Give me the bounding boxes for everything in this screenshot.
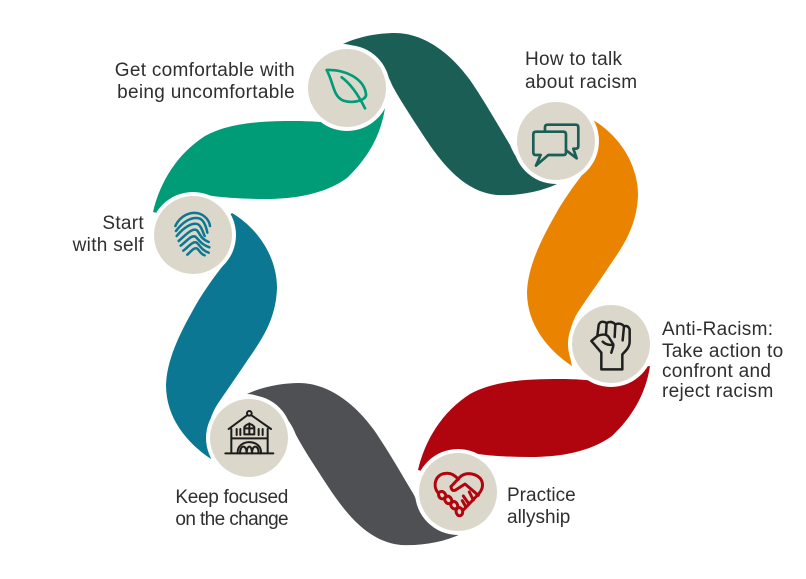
icon: fingerprint — [175, 213, 210, 255]
ribbon: teal — [166, 213, 277, 459]
ribbon: dark green — [343, 33, 557, 195]
label: practice allyship: allyship — [507, 507, 570, 528]
node: house — [206, 395, 292, 481]
node: handshake heart — [415, 449, 501, 535]
node: speech bubbles — [513, 98, 599, 184]
node: raised fist — [568, 301, 654, 387]
label: how to talk: about racism — [525, 72, 637, 93]
ribbon: charcoal — [247, 383, 461, 545]
label: anti-racism: confront and — [662, 361, 771, 382]
icon: leaf — [327, 70, 366, 108]
label: keep focused: on the change — [175, 509, 288, 530]
icon: speech bubbles — [533, 125, 578, 166]
label: how to talk: How to talk — [525, 49, 622, 70]
label: start with self: Start — [102, 213, 144, 234]
icon: house — [225, 411, 273, 453]
label: get comfortable: being uncomfortable — [117, 82, 295, 103]
label: get comfortable: Get comfortable with — [115, 60, 295, 81]
label: keep focused: Keep focused — [175, 487, 288, 508]
label: practice allyship: Practice — [507, 485, 576, 506]
icon: handshake heart — [435, 473, 482, 516]
icon: raised fist — [591, 322, 630, 369]
ribbon: crimson — [418, 366, 650, 480]
label: anti-racism: reject racism — [662, 381, 774, 402]
node: leaf — [304, 45, 390, 131]
label: start with self: with self — [72, 235, 144, 256]
node: fingerprint — [150, 192, 236, 278]
label: anti-racism: Take action to — [662, 341, 783, 362]
label: anti-racism: Anti-Racism: — [662, 319, 773, 340]
ribbon: orange — [527, 120, 638, 366]
ribbon: green — [153, 108, 385, 222]
